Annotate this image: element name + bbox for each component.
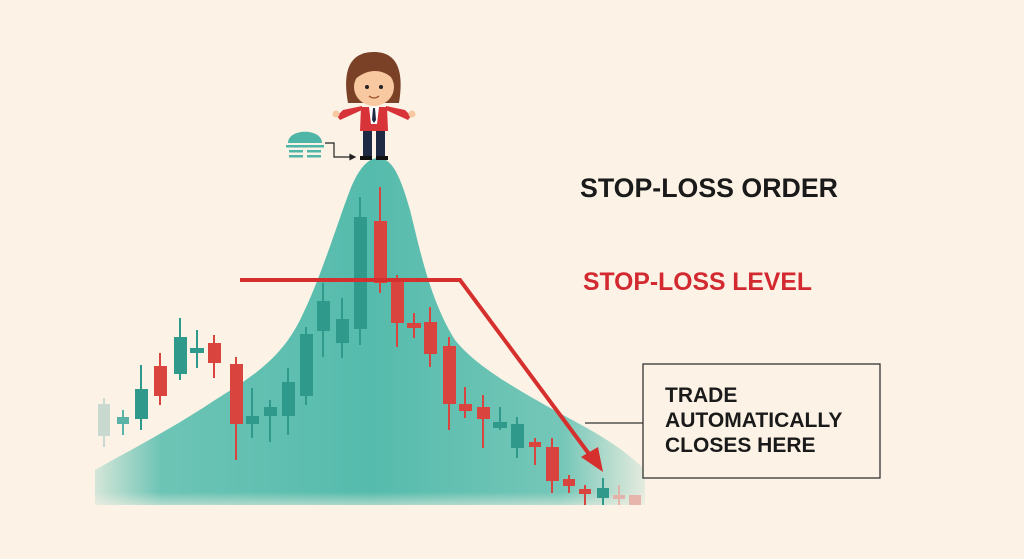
callout box: TRADE — [665, 384, 737, 407]
title: stop-loss order: STOP-LOSS ORDER — [580, 173, 838, 203]
candlestick chart — [99, 187, 640, 505]
mountain — [95, 158, 645, 505]
connector line to callout — [585, 422, 643, 424]
label: stop-loss level: STOP-LOSS LEVEL — [583, 268, 812, 296]
icon: hat — [286, 132, 324, 158]
arrow: stop-loss line — [240, 280, 603, 472]
person — [332, 52, 416, 160]
callout box: AUTOMATICALLY — [665, 409, 842, 432]
callout box — [643, 364, 880, 478]
callout box: CLOSES HERE — [665, 434, 816, 457]
connector arrow — [325, 143, 355, 160]
